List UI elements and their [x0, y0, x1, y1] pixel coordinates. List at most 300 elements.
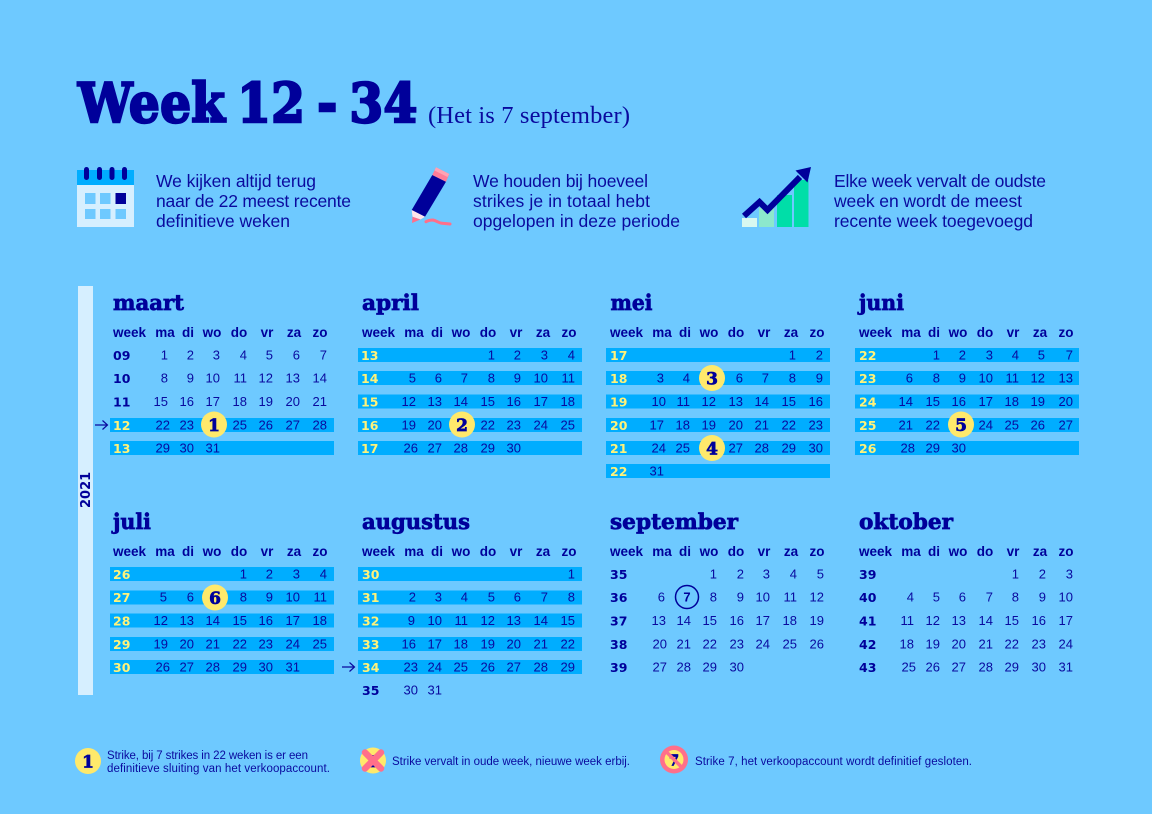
- days: 21: [313, 394, 327, 409]
- week numbers: 30: [113, 660, 131, 675]
- days: 21: [899, 418, 913, 432]
- legend: strike vervalt: [360, 748, 630, 774]
- days: 1: [161, 348, 168, 362]
- days: 29: [782, 440, 796, 456]
- days: 19: [481, 636, 495, 652]
- week numbers: 25: [859, 418, 876, 433]
- days: 5: [933, 590, 940, 604]
- column headers: za: [784, 325, 799, 340]
- legend: strike: definitieve sluiting van het verkoopaccount.: [107, 763, 330, 775]
- days: 29: [1005, 660, 1019, 674]
- days: 1: [933, 348, 940, 362]
- days: 20: [653, 636, 667, 652]
- week numbers: 24: [859, 394, 877, 410]
- week numbers: 30: [362, 567, 380, 582]
- days: 30: [180, 440, 194, 456]
- days: 25: [561, 418, 575, 432]
- days: 8: [240, 590, 247, 604]
- days: 23: [259, 636, 273, 652]
- days: 26: [481, 660, 495, 674]
- days: 21: [755, 418, 769, 432]
- column headers: za: [536, 325, 551, 340]
- days: 27: [180, 660, 194, 674]
- days: 24: [428, 660, 442, 674]
- column headers: week: [112, 325, 147, 340]
- days: 27: [952, 660, 966, 674]
- legend: strike: 1: [82, 752, 94, 772]
- week numbers: 14: [361, 371, 379, 386]
- panel: juni: juni: [857, 290, 904, 315]
- column headers: za: [287, 325, 302, 340]
- days: [652, 566, 824, 674]
- days: 11: [784, 590, 797, 604]
- text block: terugkijken: definitieve weken: [156, 211, 290, 231]
- icon: calendar: [77, 167, 134, 227]
- strike 6: [202, 584, 228, 610]
- days: 28: [454, 440, 468, 456]
- days: 11: [314, 590, 327, 604]
- days: 10: [1059, 590, 1073, 604]
- days: 12: [481, 613, 495, 628]
- days: 6: [435, 370, 442, 386]
- week numbers: 17: [361, 441, 378, 456]
- week numbers: 29: [113, 637, 130, 652]
- week numbers: 43: [859, 660, 876, 675]
- days: 16: [402, 636, 416, 652]
- days: 23: [404, 660, 418, 674]
- strike 2: [449, 412, 475, 438]
- days: 9: [514, 370, 521, 386]
- column headers: ma: [652, 325, 672, 340]
- days: 13: [652, 613, 666, 628]
- days: 11: [900, 613, 914, 628]
- days: 23: [730, 636, 744, 652]
- week numbers: 13: [361, 348, 378, 363]
- column headers: do: [977, 325, 993, 340]
- column headers: ma: [155, 544, 175, 559]
- days: 5: [266, 348, 273, 362]
- days: [402, 348, 575, 456]
- week numbers: [859, 348, 877, 456]
- days: 4: [790, 566, 797, 582]
- text block: terugkijken: naar de 22 meest recente: [156, 191, 351, 211]
- strike 5: [948, 412, 974, 438]
- column headers: week: [112, 544, 147, 559]
- days: 8: [710, 590, 717, 604]
- strike 3: 3: [706, 370, 718, 390]
- week numbers: 26: [859, 441, 877, 456]
- strike 2: 2: [456, 416, 468, 436]
- panel: augustus: augustus: [362, 509, 470, 534]
- week numbers: 09: [113, 348, 130, 363]
- days: 2: [266, 566, 273, 582]
- days: 14: [899, 394, 913, 409]
- week numbers: 12: [113, 418, 130, 433]
- column headers: di: [928, 544, 940, 559]
- week numbers: 20: [610, 418, 628, 433]
- days: 14: [677, 613, 691, 628]
- days: 26: [259, 418, 273, 432]
- days: 5: [1038, 348, 1045, 362]
- week numbers: 32: [362, 614, 379, 628]
- days: 9: [1039, 590, 1046, 604]
- column headers: [858, 544, 1074, 559]
- days: 31: [650, 464, 664, 478]
- week numbers: 10: [113, 371, 131, 386]
- days: 1: [568, 566, 575, 582]
- column headers: week: [609, 325, 644, 340]
- strike 5: 5: [955, 416, 967, 436]
- subtitle: (Het is 7 september): [428, 102, 630, 129]
- column headers: zo: [562, 325, 576, 340]
- days: 29: [561, 660, 575, 674]
- panel: april: april: [362, 290, 419, 315]
- days: 21: [206, 636, 220, 652]
- days: 16: [180, 394, 194, 409]
- days: 12: [259, 370, 273, 386]
- days: 15: [703, 613, 717, 628]
- column headers: do: [977, 544, 993, 559]
- panel: mei: [606, 290, 830, 479]
- days: 25: [313, 636, 327, 652]
- strike 4: 4: [706, 440, 718, 460]
- column headers: wo: [948, 544, 967, 559]
- days: 1: [240, 566, 247, 582]
- days: 3: [986, 348, 993, 362]
- panel: maart: maart: [113, 290, 184, 315]
- week numbers: [362, 567, 380, 698]
- week numbers: 35: [610, 567, 627, 582]
- days: 9: [737, 590, 744, 604]
- days: 22: [156, 418, 170, 432]
- days: 4: [461, 590, 468, 604]
- days: 30: [730, 660, 744, 674]
- days: 24: [286, 636, 300, 652]
- days: 7: [1066, 348, 1073, 362]
- column headers: za: [1033, 544, 1048, 559]
- days: 14: [755, 394, 769, 409]
- column headers: za: [1033, 325, 1048, 340]
- column headers: [361, 325, 576, 340]
- column headers: zo: [810, 325, 824, 340]
- days: 20: [286, 394, 300, 409]
- days: 18: [900, 636, 914, 652]
- days: 16: [809, 394, 823, 409]
- days: 26: [404, 440, 418, 456]
- column headers: wo: [451, 544, 470, 559]
- column headers: zo: [562, 544, 576, 559]
- days: 9: [266, 590, 273, 604]
- days: 17: [206, 394, 220, 409]
- title: Week 12 - 34: [77, 73, 417, 136]
- days: [402, 566, 575, 698]
- days: 3: [763, 566, 770, 582]
- column headers: vr: [261, 544, 274, 559]
- days: 22: [481, 418, 495, 432]
- week numbers: [113, 567, 131, 675]
- days: 28: [313, 418, 327, 432]
- legend: strike 7: 7: [669, 752, 679, 770]
- week numbers: 13: [113, 441, 130, 456]
- column headers: do: [728, 544, 744, 559]
- days: 7: [986, 590, 993, 604]
- panel: oktober: [858, 509, 1074, 675]
- days: 20: [729, 418, 743, 432]
- days: 22: [1005, 636, 1019, 652]
- days: 3: [1066, 566, 1073, 582]
- icon: rising chart: [742, 167, 811, 227]
- week numbers: 28: [113, 614, 130, 628]
- days: 4: [1012, 348, 1019, 362]
- column headers: zo: [312, 544, 328, 559]
- strike 1: 1: [208, 416, 220, 436]
- days: 19: [259, 394, 273, 409]
- days: 15: [782, 394, 796, 409]
- days: 19: [1031, 394, 1045, 409]
- days: 1: [710, 566, 717, 582]
- days: 2: [959, 348, 966, 362]
- days: 19: [702, 418, 716, 432]
- days: 13: [952, 613, 966, 628]
- days: 5: [488, 590, 495, 604]
- days: 20: [952, 636, 966, 652]
- days: 2: [187, 348, 194, 362]
- column headers: di: [182, 325, 194, 340]
- days: 17: [1059, 613, 1073, 628]
- days: 17: [428, 636, 442, 652]
- days: 12: [154, 613, 168, 628]
- days: 16: [507, 394, 521, 409]
- days: [899, 348, 1073, 456]
- days: 19: [810, 613, 824, 628]
- days: 21: [534, 636, 548, 652]
- days: 17: [534, 394, 548, 409]
- column headers: zo: [810, 544, 824, 559]
- today marker: 7 september: [676, 586, 698, 608]
- column headers: ma: [404, 325, 424, 340]
- days: 11: [234, 370, 247, 386]
- days: 4: [907, 590, 914, 604]
- week numbers: [859, 567, 877, 675]
- days: 14: [979, 613, 993, 628]
- week numbers: 21: [610, 441, 627, 456]
- legend: strike: Strike, bij 7 strikes in 22 weken is er een: [107, 750, 308, 762]
- days: 29: [703, 660, 717, 674]
- week numbers: 39: [610, 660, 627, 675]
- week numbers: 35: [362, 683, 379, 698]
- days: 25: [783, 636, 797, 652]
- days: 10: [428, 613, 442, 628]
- days: 6: [187, 590, 194, 604]
- days: 29: [481, 440, 495, 456]
- days: 16: [952, 394, 966, 409]
- days: 4: [568, 348, 575, 362]
- days: 16: [730, 613, 744, 628]
- days: 8: [789, 370, 796, 386]
- days: 15: [926, 394, 940, 409]
- week numbers: 18: [610, 371, 627, 386]
- days: 3: [435, 590, 442, 604]
- days: 30: [404, 682, 418, 698]
- column headers: za: [784, 544, 799, 559]
- column headers: vr: [1007, 544, 1020, 559]
- column headers: week: [609, 544, 644, 559]
- days: 22: [782, 418, 796, 432]
- strike 3: [699, 365, 725, 391]
- days: 31: [428, 682, 442, 698]
- days: 7: [541, 590, 548, 604]
- days: 14: [454, 394, 468, 409]
- panel: april: [358, 290, 582, 456]
- days: 28: [534, 660, 548, 674]
- days: 28: [677, 660, 691, 674]
- column headers: vr: [510, 325, 523, 340]
- days: 18: [676, 418, 690, 432]
- column headers: wo: [699, 544, 718, 559]
- days: 12: [926, 613, 940, 628]
- column headers: di: [679, 544, 691, 559]
- days: 22: [703, 636, 717, 652]
- days: 13: [507, 613, 521, 628]
- days: 10: [652, 394, 666, 409]
- days: 15: [154, 394, 168, 409]
- days: 27: [286, 418, 300, 432]
- days: 28: [901, 440, 915, 456]
- days: 8: [1012, 590, 1019, 604]
- days: 2: [1039, 566, 1046, 582]
- week numbers: 23: [859, 371, 876, 386]
- week numbers: 41: [859, 614, 876, 628]
- column headers: zo: [1058, 544, 1074, 559]
- days: 6: [959, 590, 966, 604]
- days: 27: [653, 660, 667, 674]
- strike 1: [201, 412, 227, 438]
- days: 28: [755, 440, 769, 456]
- column headers: do: [728, 325, 744, 340]
- week numbers: 38: [610, 637, 627, 652]
- days: 31: [206, 440, 220, 456]
- year sidebar: [78, 286, 94, 695]
- column headers: wo: [451, 325, 470, 340]
- days: [154, 566, 327, 674]
- days: 14: [206, 613, 220, 628]
- days: 11: [454, 613, 468, 628]
- days: 19: [402, 418, 416, 432]
- days: 26: [156, 660, 170, 674]
- days: 5: [409, 370, 416, 386]
- legend: strike vervalt: Strike vervalt in oude week, nieuwe week erbij.: [392, 756, 630, 768]
- legend: strike 7: [660, 746, 972, 774]
- week numbers: 22: [610, 464, 627, 479]
- column headers: wo: [699, 325, 718, 340]
- text block: terugkijken: [156, 171, 351, 231]
- week numbers: 11: [113, 394, 130, 410]
- days: 7: [762, 370, 769, 386]
- days: 7: [461, 370, 468, 386]
- week numbers: 15: [361, 394, 378, 410]
- days: 8: [568, 590, 575, 604]
- days: 1: [488, 348, 495, 362]
- days: 27: [428, 440, 442, 456]
- text block: strikes: strikes je in totaal hebt: [473, 191, 650, 211]
- column headers: week: [858, 544, 893, 559]
- days: 15: [1005, 613, 1019, 628]
- week numbers: 31: [362, 590, 379, 605]
- days: 17: [286, 613, 300, 628]
- days: 26: [1031, 418, 1045, 432]
- column headers: week: [361, 544, 396, 559]
- days: 15: [481, 394, 495, 409]
- panel: juni: [855, 290, 1079, 456]
- column headers: do: [480, 544, 496, 559]
- column headers: [112, 325, 328, 340]
- days: 30: [1032, 660, 1046, 674]
- days: 18: [313, 613, 327, 628]
- week numbers: [610, 348, 628, 479]
- week numbers: 26: [113, 567, 131, 582]
- week numbers: 22: [859, 348, 876, 363]
- column headers: ma: [155, 325, 175, 340]
- days: 16: [259, 613, 273, 628]
- days: 30: [809, 440, 823, 456]
- column headers: [609, 325, 824, 340]
- column headers: week: [858, 325, 893, 340]
- column headers: vr: [1007, 325, 1020, 340]
- days: 23: [507, 418, 521, 432]
- days: 12: [702, 394, 716, 409]
- days: 25: [1005, 418, 1019, 432]
- legend: strike vervalt: 1: [367, 752, 379, 771]
- days: 30: [507, 440, 521, 456]
- text block: vervallen: recente week toegevoegd: [834, 211, 1033, 231]
- days: 17: [650, 418, 664, 432]
- days: 20: [507, 636, 521, 652]
- column headers: week: [361, 325, 396, 340]
- days: 4: [683, 370, 690, 386]
- week numbers: 36: [610, 590, 628, 605]
- column headers: ma: [901, 325, 921, 340]
- days: 8: [933, 370, 940, 386]
- days: 25: [902, 660, 916, 674]
- week numbers: 19: [610, 394, 627, 410]
- days: 3: [213, 348, 220, 362]
- days: 20: [1059, 394, 1073, 409]
- days: 24: [756, 636, 770, 652]
- text block: vervallen: Elke week vervalt de oudste: [834, 171, 1046, 191]
- days: 22: [926, 418, 940, 432]
- days: 12: [810, 590, 824, 604]
- days: 10: [979, 370, 993, 386]
- days: 11: [676, 394, 690, 409]
- panel: september: september: [610, 509, 739, 534]
- text block: vervallen: [833, 171, 1046, 231]
- days: 10: [206, 370, 220, 386]
- column headers: wo: [202, 544, 221, 559]
- column headers: do: [231, 325, 247, 340]
- days: 27: [507, 660, 521, 674]
- column headers: ma: [404, 544, 424, 559]
- days: 17: [756, 613, 770, 628]
- days: 4: [240, 348, 247, 362]
- days: 8: [161, 370, 168, 386]
- column headers: [112, 544, 328, 559]
- days: 2: [514, 348, 521, 362]
- panel: maart: [95, 290, 334, 456]
- days: 21: [979, 636, 993, 652]
- column headers: di: [928, 325, 940, 340]
- days: 13: [729, 394, 743, 409]
- days: 25: [454, 660, 468, 674]
